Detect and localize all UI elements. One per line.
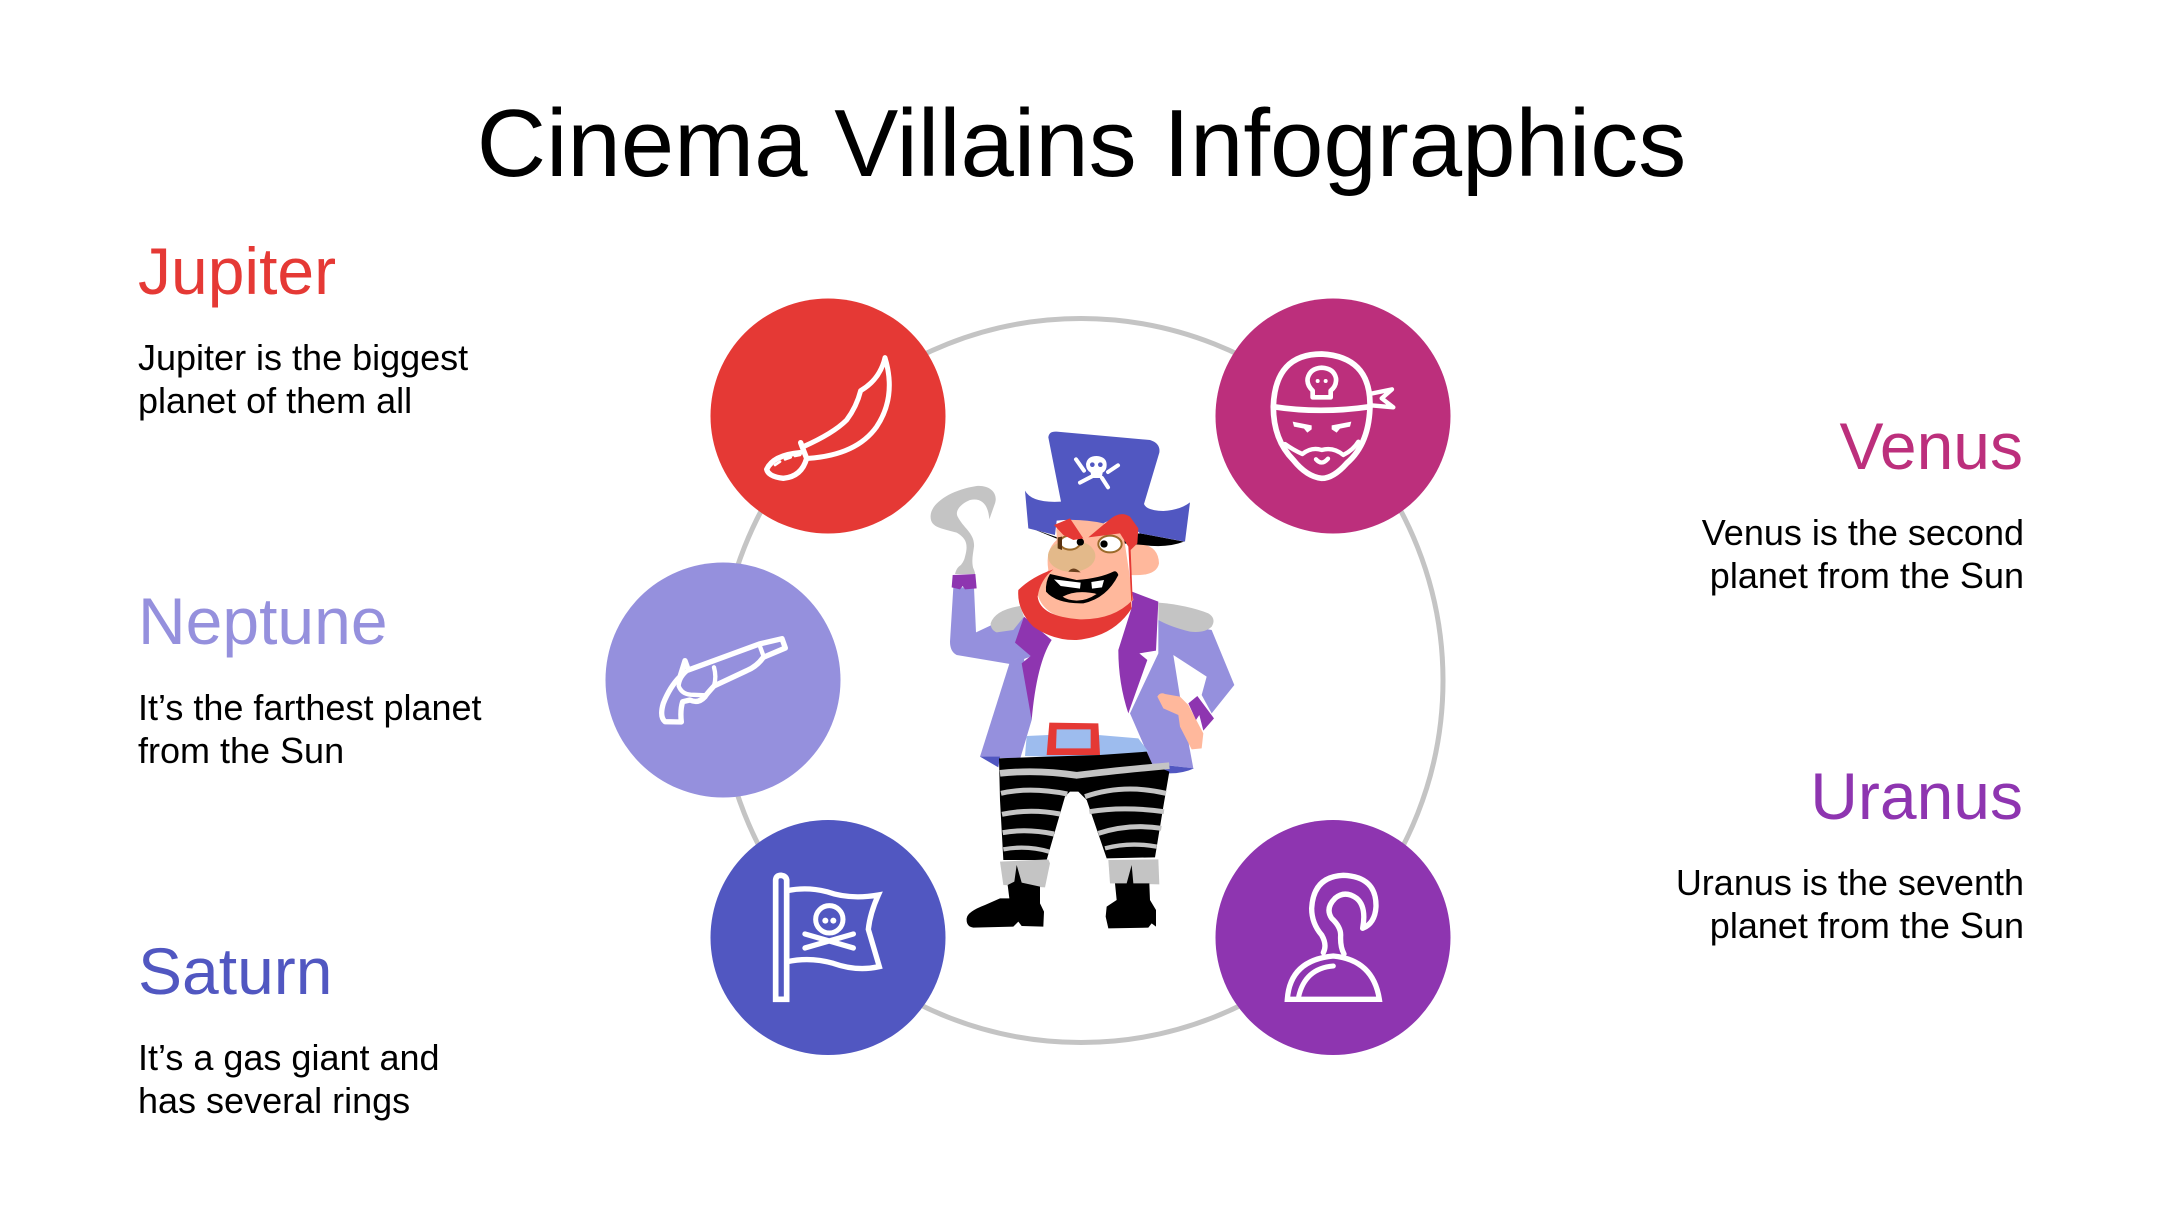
right cuff xyxy=(1188,696,1214,731)
heading: Neptune: Neptune xyxy=(138,584,388,658)
icon: sword on red circle xyxy=(710,298,946,534)
illustration: pirate character xyxy=(931,432,1234,928)
shirt xyxy=(1023,613,1130,733)
title: Cinema Villains Infographics xyxy=(477,90,1686,197)
hat xyxy=(1025,432,1190,542)
icon: pistol on periwinkle circle xyxy=(606,562,840,798)
text: Jupiter description: Jupiter is the biggest xyxy=(138,337,468,378)
eyes xyxy=(1060,536,1080,550)
panel: Neptune xyxy=(138,584,482,771)
ear xyxy=(1130,544,1159,575)
heading: Jupiter: Jupiter xyxy=(138,234,336,308)
boots xyxy=(967,865,1044,928)
face xyxy=(1037,519,1133,620)
panel: Saturn xyxy=(138,934,440,1121)
text: Uranus description: Uranus is the seventh xyxy=(1676,862,2024,903)
text: Saturn description: It’s a gas giant and xyxy=(138,1037,440,1078)
icon: hook on purple circle xyxy=(1216,820,1450,1055)
icon: bandana face on magenta circle xyxy=(1216,298,1450,534)
ring connecting the icons xyxy=(719,318,1443,1042)
buckle xyxy=(1047,723,1100,755)
jacket left sleeve xyxy=(950,587,1031,664)
trousers xyxy=(999,752,1169,860)
lower body xyxy=(967,693,1214,928)
jacket hem shadows xyxy=(980,757,1194,773)
belt xyxy=(1025,735,1148,757)
mouth xyxy=(1046,571,1118,603)
heading: Saturn: Saturn xyxy=(138,934,332,1008)
icon: pirate flag on blue circle xyxy=(710,820,946,1055)
beard and brows xyxy=(1018,514,1138,640)
trouser cuffs xyxy=(1000,859,1050,887)
text: Uranus description: planet from the Sun xyxy=(1710,905,2024,946)
smoke xyxy=(931,486,996,573)
heading: Venus: Venus xyxy=(1840,409,2023,483)
text: Neptune description: It’s the farthest planet xyxy=(138,687,482,728)
cuff xyxy=(952,574,977,589)
nose xyxy=(1048,540,1095,572)
upper body, head and hat xyxy=(931,432,1234,768)
heading: Uranus: Uranus xyxy=(1810,759,2023,833)
jacket right panel and sleeve xyxy=(1130,620,1234,768)
text: Jupiter description: planet of them all xyxy=(138,380,412,421)
panel: Venus xyxy=(1702,409,2024,596)
vest xyxy=(1015,617,1052,720)
panel: Uranus xyxy=(1676,759,2024,946)
text: Neptune description: from the Sun xyxy=(138,730,344,771)
text: Saturn description: has several rings xyxy=(138,1080,410,1121)
skull and crossbones xyxy=(1076,456,1118,487)
jacket left panel xyxy=(980,658,1032,759)
hat underside xyxy=(1032,528,1184,546)
text: Venus description: Venus is the second xyxy=(1702,512,2024,553)
epaulettes xyxy=(991,606,1024,632)
panel: Jupiter xyxy=(138,234,468,421)
trouser stripes xyxy=(1000,766,1169,852)
hand xyxy=(1157,693,1203,749)
text: Venus description: planet from the Sun xyxy=(1710,555,2024,596)
